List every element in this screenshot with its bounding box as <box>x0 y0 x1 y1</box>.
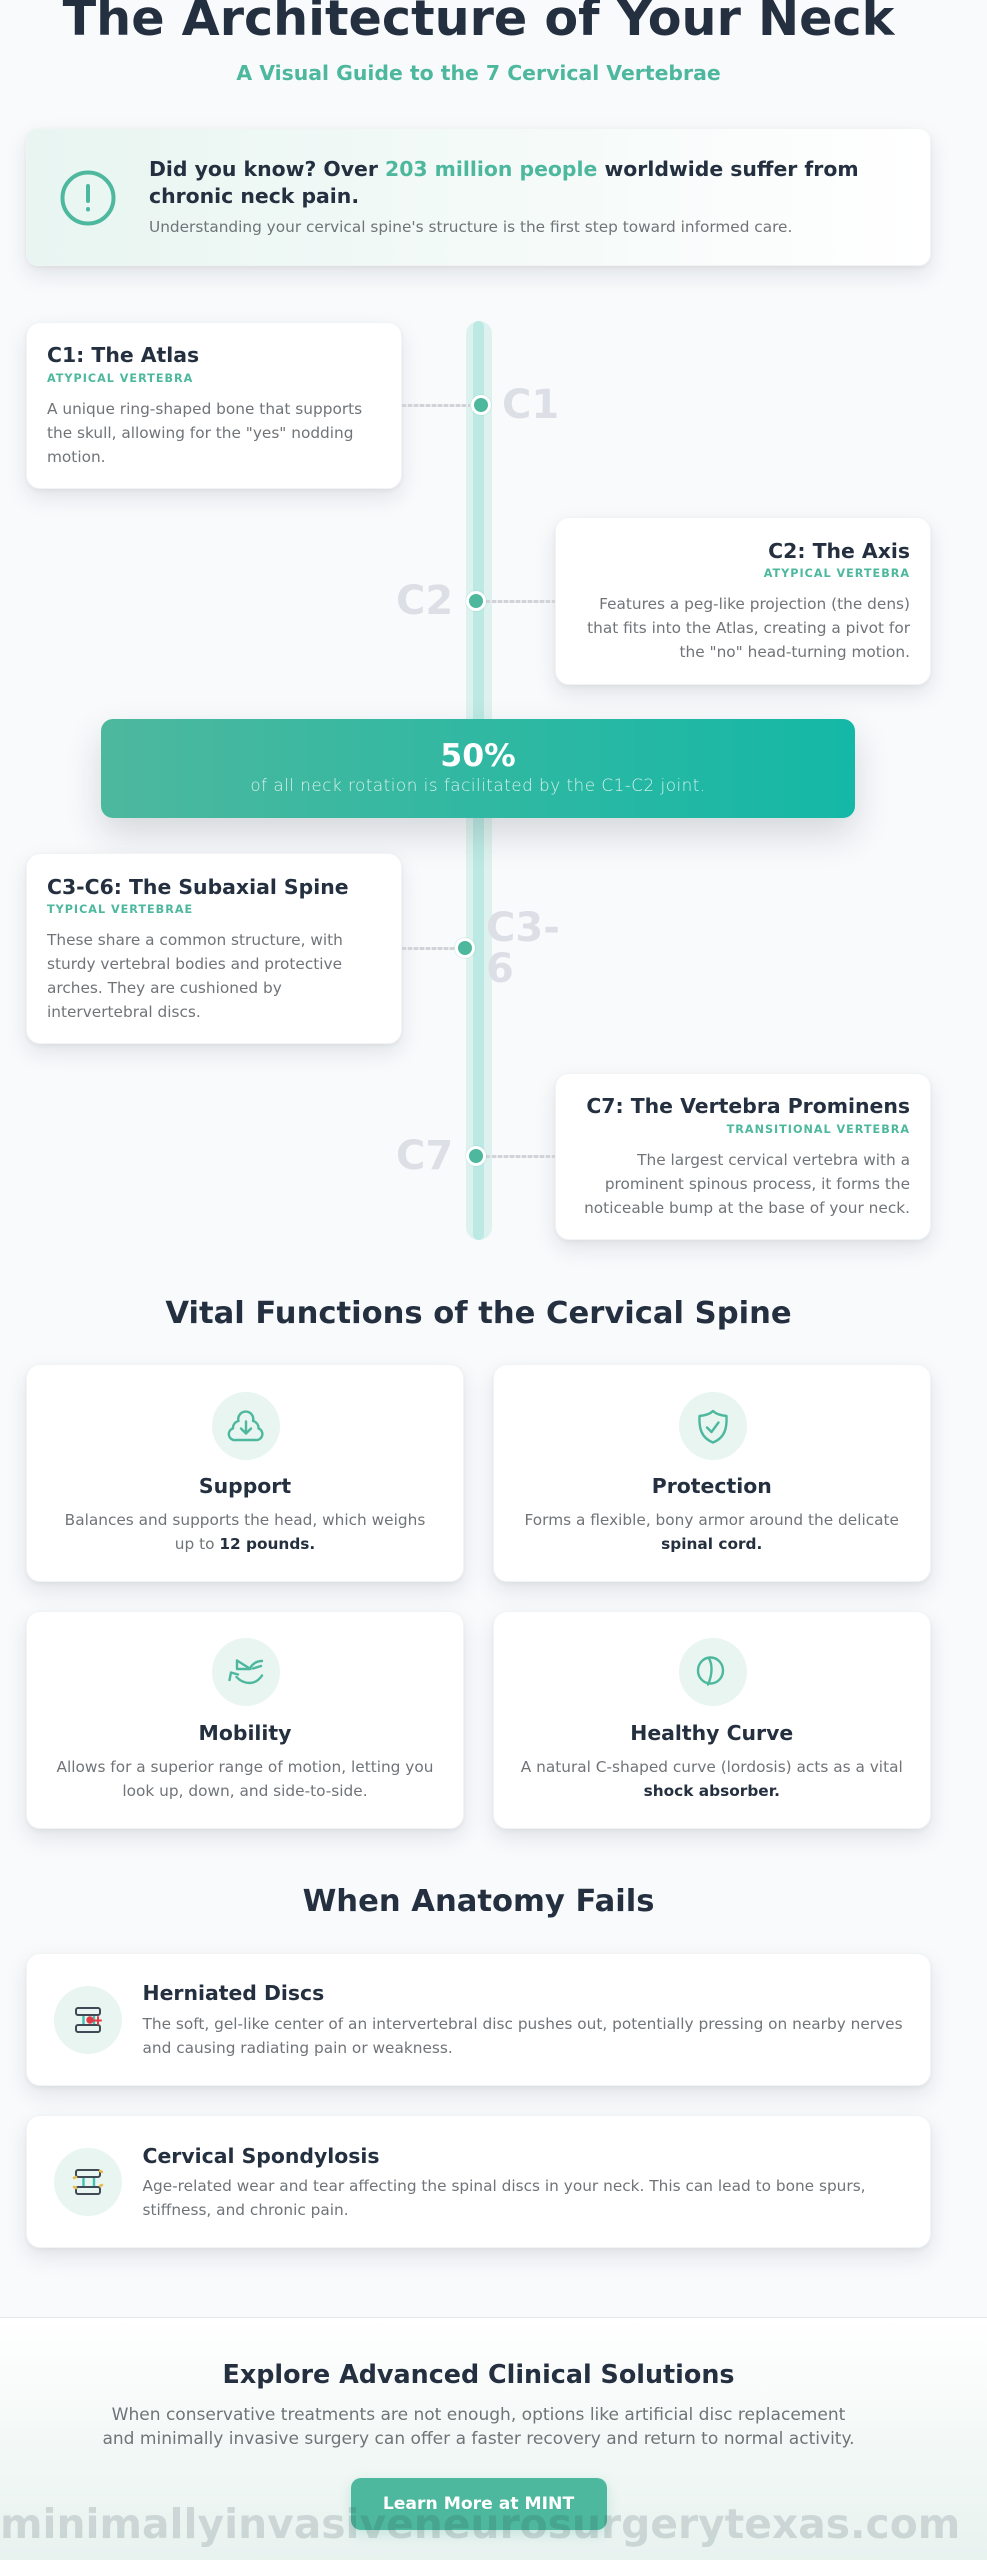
C7 description: The largest cervical vertebra with a <box>637 1150 910 1168</box>
support title: Support <box>199 1474 291 1498</box>
C1 description: A unique ring-shaped bone that supports <box>47 400 362 418</box>
panel: C3-C6 card <box>26 853 402 1044</box>
cervical spondylosis text <box>142 2176 866 2218</box>
stat number: 50% <box>440 738 516 774</box>
protection text <box>525 1511 899 1553</box>
protection text: spinal cord. <box>661 1535 762 1553</box>
support text: up to 12 pounds. <box>175 1535 315 1553</box>
timeline spine <box>466 321 492 1240</box>
subtitle: A Visual Guide to the 7 Cervical Vertebrae <box>236 61 721 85</box>
panel: healthy curve <box>493 1610 930 1828</box>
C1 tag: ATYPICAL VERTEBRA <box>47 372 193 385</box>
mobility text: look up, down, and side-to-side. <box>122 1782 368 1800</box>
C3-C6 description: sturdy vertebral bodies and protective <box>47 954 342 972</box>
C3-C6 label: C3- <box>486 905 560 951</box>
protection title: Protection <box>652 1474 772 1498</box>
panel: C7 card <box>555 1073 930 1240</box>
C7 label: C7 <box>396 1133 453 1179</box>
callout headline <box>149 157 859 208</box>
C3-C6 description: arches. They are cushioned by <box>47 978 282 996</box>
icon: rotation arrows <box>212 1638 280 1706</box>
C2 connector <box>486 600 555 602</box>
healthy curve text <box>520 1758 903 1800</box>
C2 description: that fits into the Atlas, creating a pivot for <box>587 619 910 637</box>
panel: mobility <box>26 1610 464 1828</box>
healthy curve title: Healthy Curve <box>630 1720 793 1744</box>
C3-C6 label <box>486 905 560 992</box>
call to action button <box>350 2478 606 2530</box>
C3-C6 description <box>46 930 343 1020</box>
footer text <box>102 2405 855 2449</box>
cervical spondylosis text: stiffness, and chronic pain. <box>142 2200 349 2218</box>
call to action button: Learn More at MINT <box>383 2494 574 2514</box>
C1 description: motion. <box>47 448 106 466</box>
mobility text <box>56 1758 433 1800</box>
panel: C2 card <box>555 517 930 685</box>
C1 connector <box>402 404 470 406</box>
icon: curve in circle <box>678 1638 746 1706</box>
icon: exclamation in circle <box>60 170 116 226</box>
mobility text: Allows for a superior range of motion, letting you <box>57 1758 433 1776</box>
C7 description: prominent spinous process, it forms the <box>605 1174 910 1192</box>
C7 description: noticeable bump at the base of your neck. <box>584 1198 910 1216</box>
C3-C6 marker dot <box>454 938 474 958</box>
support text: Balances and supports the head, which weighs <box>65 1511 425 1529</box>
C3-C6 connector <box>402 946 456 950</box>
section heading: vital functions: Vital Functions of the Cervical Spine <box>165 1296 792 1330</box>
C1 description: the skull, allowing for the "yes" nodding <box>47 424 354 442</box>
panel: cervical spondylosis <box>26 2114 930 2248</box>
callout headline: chronic neck pain. <box>149 184 359 208</box>
herniated discs title: Herniated Discs <box>142 1980 324 2004</box>
C3-C6 label: 6 <box>486 946 514 992</box>
C7 connector <box>486 1154 555 1158</box>
stat banner <box>101 719 855 818</box>
panel: did you know callout <box>26 128 930 266</box>
healthy curve text: A natural C-shaped curve (lordosis) acts as a vital <box>521 1758 903 1776</box>
C3-C6 tag: TYPICAL VERTEBRAE <box>47 902 193 916</box>
C2 marker dot <box>466 591 486 611</box>
C7 heading: C7: The Vertebra Prominens <box>586 1094 910 1118</box>
footer text: and minimally invasive surgery can offer a faster recovery and return to normal activity. <box>102 2429 855 2449</box>
section heading: when anatomy fails: When Anatomy Fails <box>303 1884 654 1918</box>
icon: cloud with arrow <box>212 1392 280 1460</box>
C2 tag: ATYPICAL VERTEBRA <box>764 567 910 580</box>
C2 description: the "no" head-turning motion. <box>680 643 910 661</box>
panel: herniated discs <box>26 1952 930 2086</box>
C3-C6 description: intervertebral discs. <box>47 1002 201 1020</box>
stat caption: of all neck rotation is facilitated by the C1-C2 joint. <box>250 775 706 795</box>
C1 label: C1 <box>502 382 559 428</box>
healthy curve text: shock absorber. <box>644 1782 780 1800</box>
icon: shield check <box>678 1392 746 1460</box>
C2 heading: C2: The Axis <box>768 539 910 563</box>
C1 marker dot <box>471 395 491 415</box>
C2 label: C2 <box>396 578 453 624</box>
C2 description: Features a peg-like projection (the dens) <box>599 595 910 613</box>
callout headline: Did you know? Over 203 million people worldwide suffer from <box>149 157 859 181</box>
C7 marker dot <box>466 1146 486 1166</box>
C2 description <box>587 595 910 661</box>
panel: support <box>26 1364 464 1582</box>
support text <box>65 1511 425 1553</box>
watermark url: minimallyinvasiveneurosurgerytexas.com <box>0 2500 960 2548</box>
panel: C1 card <box>26 322 402 489</box>
C1 heading: C1: The Atlas <box>47 343 199 367</box>
icon: herniated disc <box>54 1986 122 2054</box>
C1 description <box>47 400 362 466</box>
C3-C6 heading: C3-C6: The Subaxial Spine <box>47 874 349 898</box>
herniated discs text <box>142 2014 903 2056</box>
footer panel <box>0 2317 987 2560</box>
cervical spondylosis text: Age-related wear and tear affecting the spinal discs in your neck. This can lead to bone spurs, <box>142 2176 866 2194</box>
herniated discs text: and causing radiating pain or weakness. <box>142 2038 453 2056</box>
C7 tag: TRANSITIONAL VERTEBRA <box>727 1122 910 1136</box>
C3-C6 description: These share a common structure, with <box>47 930 343 948</box>
C7 description <box>584 1150 910 1216</box>
footer heading: Explore Advanced Clinical Solutions <box>222 2358 735 2388</box>
panel: protection <box>493 1364 930 1582</box>
footer text: When conservative treatments are not enough, options like artificial disc replacement <box>112 2405 845 2425</box>
protection text: Forms a flexible, bony armor around the delicate <box>525 1511 899 1529</box>
mobility title: Mobility <box>199 1720 291 1744</box>
icon: spondylosis spurs <box>54 2148 122 2216</box>
callout subtext: Understanding your cervical spine's structure is the first step toward informed care. <box>149 218 792 236</box>
cervical spondylosis title: Cervical Spondylosis <box>142 2144 380 2168</box>
herniated discs text: The soft, gel-like center of an intervertebral disc pushes out, potentially pressing on nearby nerves <box>142 2014 903 2032</box>
